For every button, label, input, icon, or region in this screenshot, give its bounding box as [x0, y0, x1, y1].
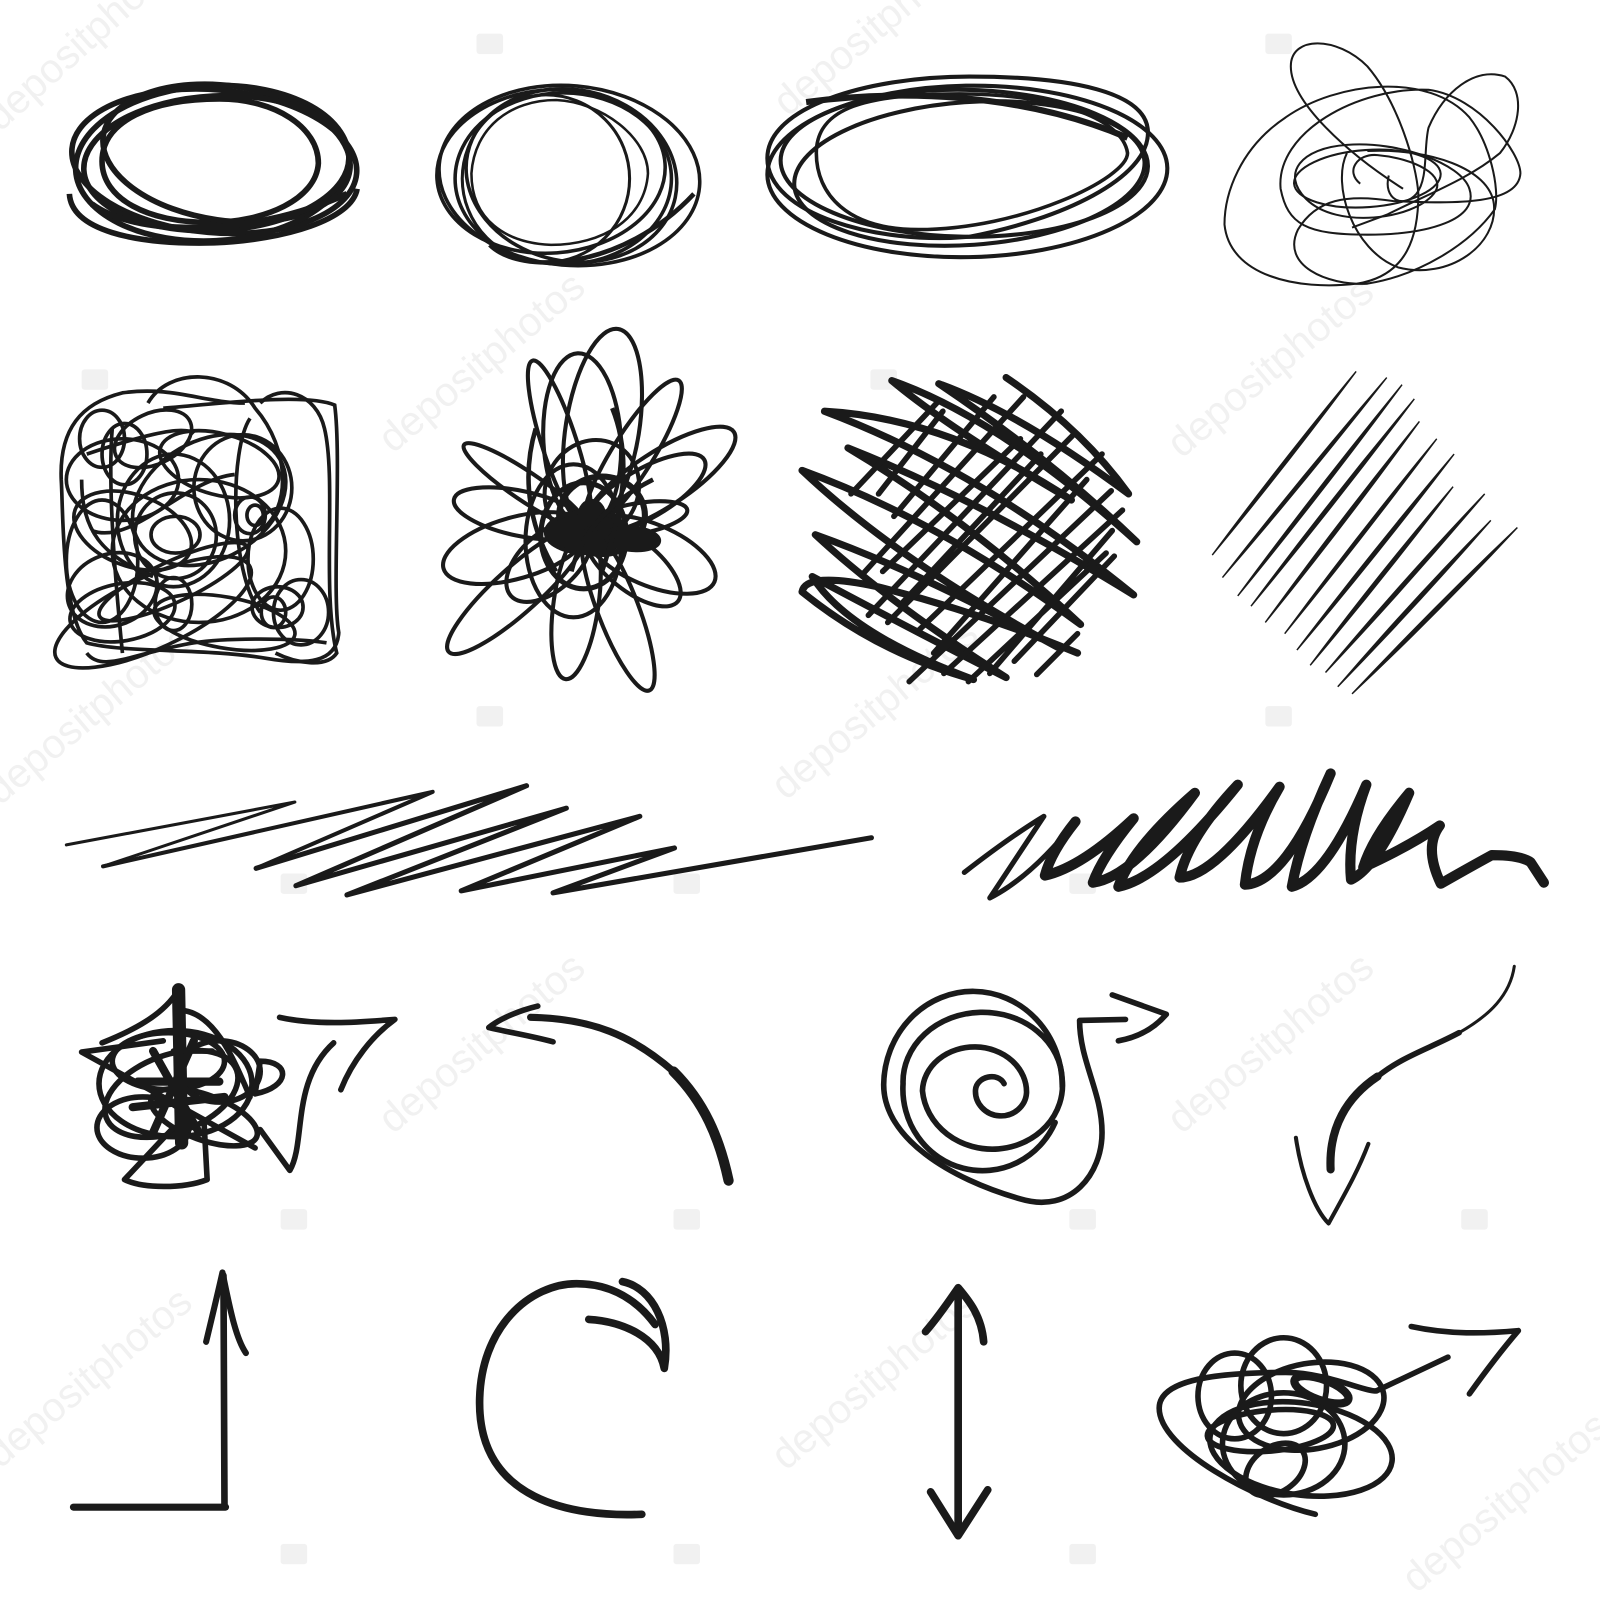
- L-shaped up arrow: [73, 1272, 246, 1507]
- zigzag stroke: long thin: [66, 786, 871, 895]
- watermark: depositphotos text: depositphotos: [369, 262, 593, 461]
- tangled scribble with arrow: [1159, 1327, 1518, 1514]
- spiral with arrow: [884, 991, 1166, 1202]
- C-shaped curved arrow: [480, 1282, 666, 1515]
- double headed vertical arrow: [926, 1288, 988, 1536]
- zigzag stroke: thick wavy: [964, 773, 1544, 898]
- watermark: depositphotos text: depositphotos: [762, 609, 986, 808]
- curved arrow pointing left: [489, 1006, 729, 1181]
- oval scribble: medium round: [431, 70, 707, 281]
- watermark: depositphotos text: depositphotos: [1158, 268, 1382, 466]
- watermark: depositphotos text: depositphotos: [762, 1280, 986, 1478]
- watermark: depositphotos text: depositphotos: [369, 943, 593, 1142]
- watermark: depositphotos text: depositphotos: [1158, 943, 1382, 1142]
- oval scribble: thick: [66, 69, 363, 248]
- oval scribble: wide: [766, 77, 1169, 261]
- cross hatched scribble: [802, 378, 1137, 682]
- flower scribble: [434, 323, 749, 698]
- tangled square scribble: [41, 377, 339, 690]
- star scribble with arrow: [82, 990, 395, 1186]
- S-curve arrow pointing down: [1296, 966, 1514, 1223]
- diagonal parallel lines: [1212, 371, 1517, 694]
- tangled thin scribble: [1224, 43, 1520, 285]
